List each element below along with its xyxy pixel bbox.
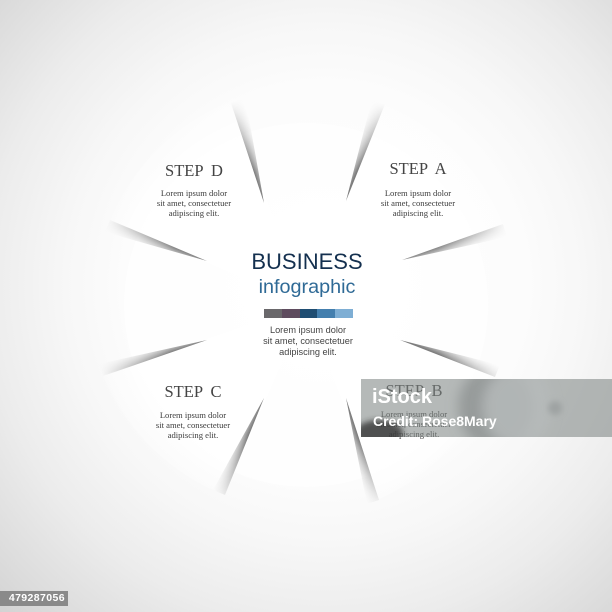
image id badge bbox=[0, 591, 68, 606]
step A text bbox=[381, 159, 456, 218]
step B text bbox=[377, 381, 451, 439]
central disc bbox=[124, 123, 488, 487]
wedge shadows bbox=[99, 96, 507, 504]
step C text: adipiscing elit. bbox=[168, 430, 218, 440]
central text bbox=[263, 325, 353, 357]
step A text: STEP A bbox=[389, 159, 447, 178]
paper sector: step A bbox=[306, 105, 503, 305]
watermark banner bbox=[361, 379, 612, 437]
step D text: adipiscing elit. bbox=[169, 208, 219, 218]
image id badge: 479287056 bbox=[9, 592, 65, 604]
step B text: Lorem ipsum dolor bbox=[381, 409, 447, 419]
title: BUSINESS bbox=[251, 249, 363, 274]
watermark credit: Credit: Rose8Mary bbox=[373, 413, 497, 429]
central text: Lorem ipsum dolor bbox=[270, 325, 346, 335]
step A text: sit amet, consectetuer bbox=[381, 198, 455, 208]
step C text: STEP C bbox=[164, 382, 222, 401]
step A text: adipiscing elit. bbox=[393, 208, 443, 218]
wedge shadow: left upper bbox=[112, 222, 206, 261]
paper sector: step B bbox=[306, 305, 493, 499]
step D text: sit amet, consectetuer bbox=[157, 198, 231, 208]
wedge shadow: top left bbox=[232, 107, 264, 203]
wedge shadow: bottom left bbox=[218, 398, 264, 495]
step B text: adipiscing elit. bbox=[389, 429, 439, 439]
wedge shadow: right upper bbox=[402, 224, 507, 260]
step C text: Lorem ipsum dolor bbox=[160, 410, 226, 420]
central text: sit amet, consectetuer bbox=[263, 336, 353, 346]
watermark text: iStock bbox=[372, 386, 432, 408]
step D text: Lorem ipsum dolor bbox=[161, 188, 227, 198]
colour strip bbox=[264, 309, 353, 318]
wedge shadow: left lower bbox=[106, 340, 206, 374]
step A text: Lorem ipsum dolor bbox=[385, 188, 451, 198]
wedge shadow: bottom right bbox=[346, 398, 379, 504]
watermark blurred shapes bbox=[361, 379, 562, 437]
paper wheel with wedge shadows bbox=[106, 107, 502, 501]
step C text: sit amet, consectetuer bbox=[156, 420, 230, 430]
paper sector: step C bbox=[103, 305, 306, 495]
wedge shadow: right lower bbox=[400, 340, 500, 377]
step D text bbox=[157, 161, 232, 218]
step B text: STEP B bbox=[385, 381, 443, 400]
step C text bbox=[156, 382, 230, 440]
step D text: STEP D bbox=[165, 161, 223, 180]
subtitle: infographic bbox=[259, 276, 355, 298]
wedge shadow: top right bbox=[346, 108, 383, 201]
step B text: sit amet, consectetuer bbox=[377, 419, 451, 429]
central text: adipiscing elit. bbox=[279, 347, 337, 357]
paper sector: step D bbox=[110, 102, 306, 305]
